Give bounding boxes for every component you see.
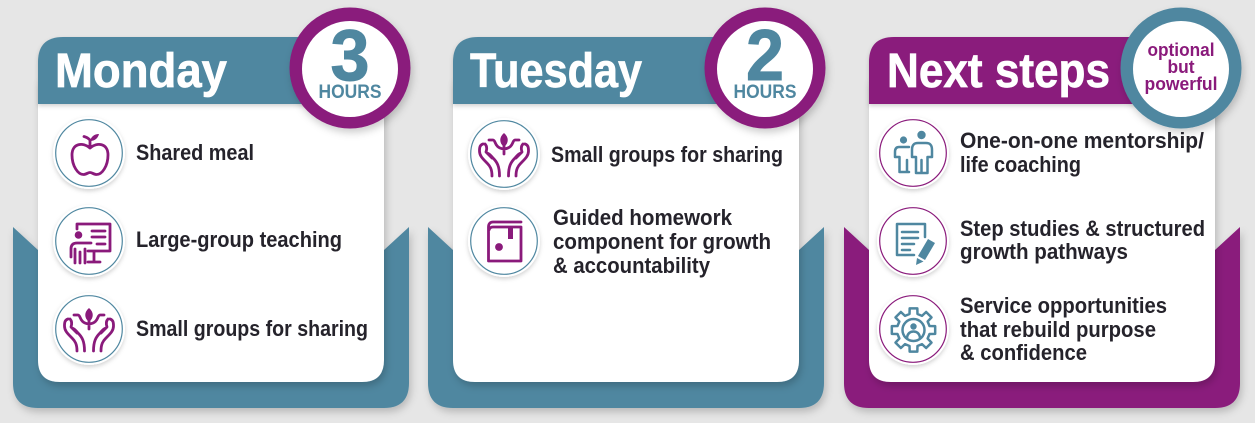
badge: optional but powerful: optional xyxy=(1148,40,1214,60)
icon: hands and plant xyxy=(468,118,540,190)
icon: large-group teaching xyxy=(53,205,125,277)
text: Small groups for sharing: Small groups for sharing xyxy=(136,316,368,341)
text: One-on-one mentorship: life coaching xyxy=(960,152,1081,177)
icon: two people xyxy=(877,117,949,189)
heading: Next steps xyxy=(869,37,1181,104)
text: Step studies: growth pathways xyxy=(960,239,1128,264)
heading: Tuesday: Tuesday xyxy=(470,45,642,98)
text: Large-group teaching: Large-group teaching xyxy=(136,227,342,252)
icon: book xyxy=(468,205,540,277)
text: Guided homework component: Guided homework xyxy=(553,205,733,230)
badge: 3 hours: 3 xyxy=(330,16,370,96)
icon: gear with person xyxy=(877,293,949,365)
panel: Tuesday xyxy=(428,8,826,408)
text: Service opportunities: Service opportunities xyxy=(960,293,1167,318)
text: Service opportunities: & confidence xyxy=(960,340,1087,365)
heading: Next steps: Next steps xyxy=(887,45,1110,98)
icon: hands and plant xyxy=(53,293,125,365)
text: Small groups for sharing: Small groups for sharing xyxy=(551,142,783,167)
badge: optional but powerful: but xyxy=(1168,57,1195,77)
heading: Tuesday xyxy=(453,37,765,104)
text: Guided homework component: component for growth xyxy=(553,229,771,254)
badge: 2 hours: 2 xyxy=(746,16,784,96)
badge: 3 hours: HOURS xyxy=(318,82,382,103)
heading: Monday xyxy=(38,37,350,104)
badge: 2 hours: HOURS xyxy=(734,82,796,103)
panel: Next steps xyxy=(844,8,1242,408)
heading: Monday: Monday xyxy=(55,45,227,98)
icon: apple xyxy=(53,117,125,189)
badge: optional but powerful: powerful xyxy=(1144,74,1218,94)
text: Shared meal: Shared meal xyxy=(136,140,254,165)
icon: document and pencil xyxy=(877,205,949,277)
badge: 2 hours xyxy=(704,8,826,128)
text: One-on-one mentorship: One-on-one mentorship/ xyxy=(960,128,1204,153)
text: Step studies: Step studies & structured xyxy=(960,216,1205,241)
badge: optional but powerful xyxy=(1120,8,1242,128)
text: Service opportunities: that rebuild purpose xyxy=(960,317,1156,342)
panel: Monday xyxy=(13,8,410,408)
text: Guided homework component: & accountability xyxy=(553,253,711,278)
badge: 3 hours xyxy=(290,8,410,128)
